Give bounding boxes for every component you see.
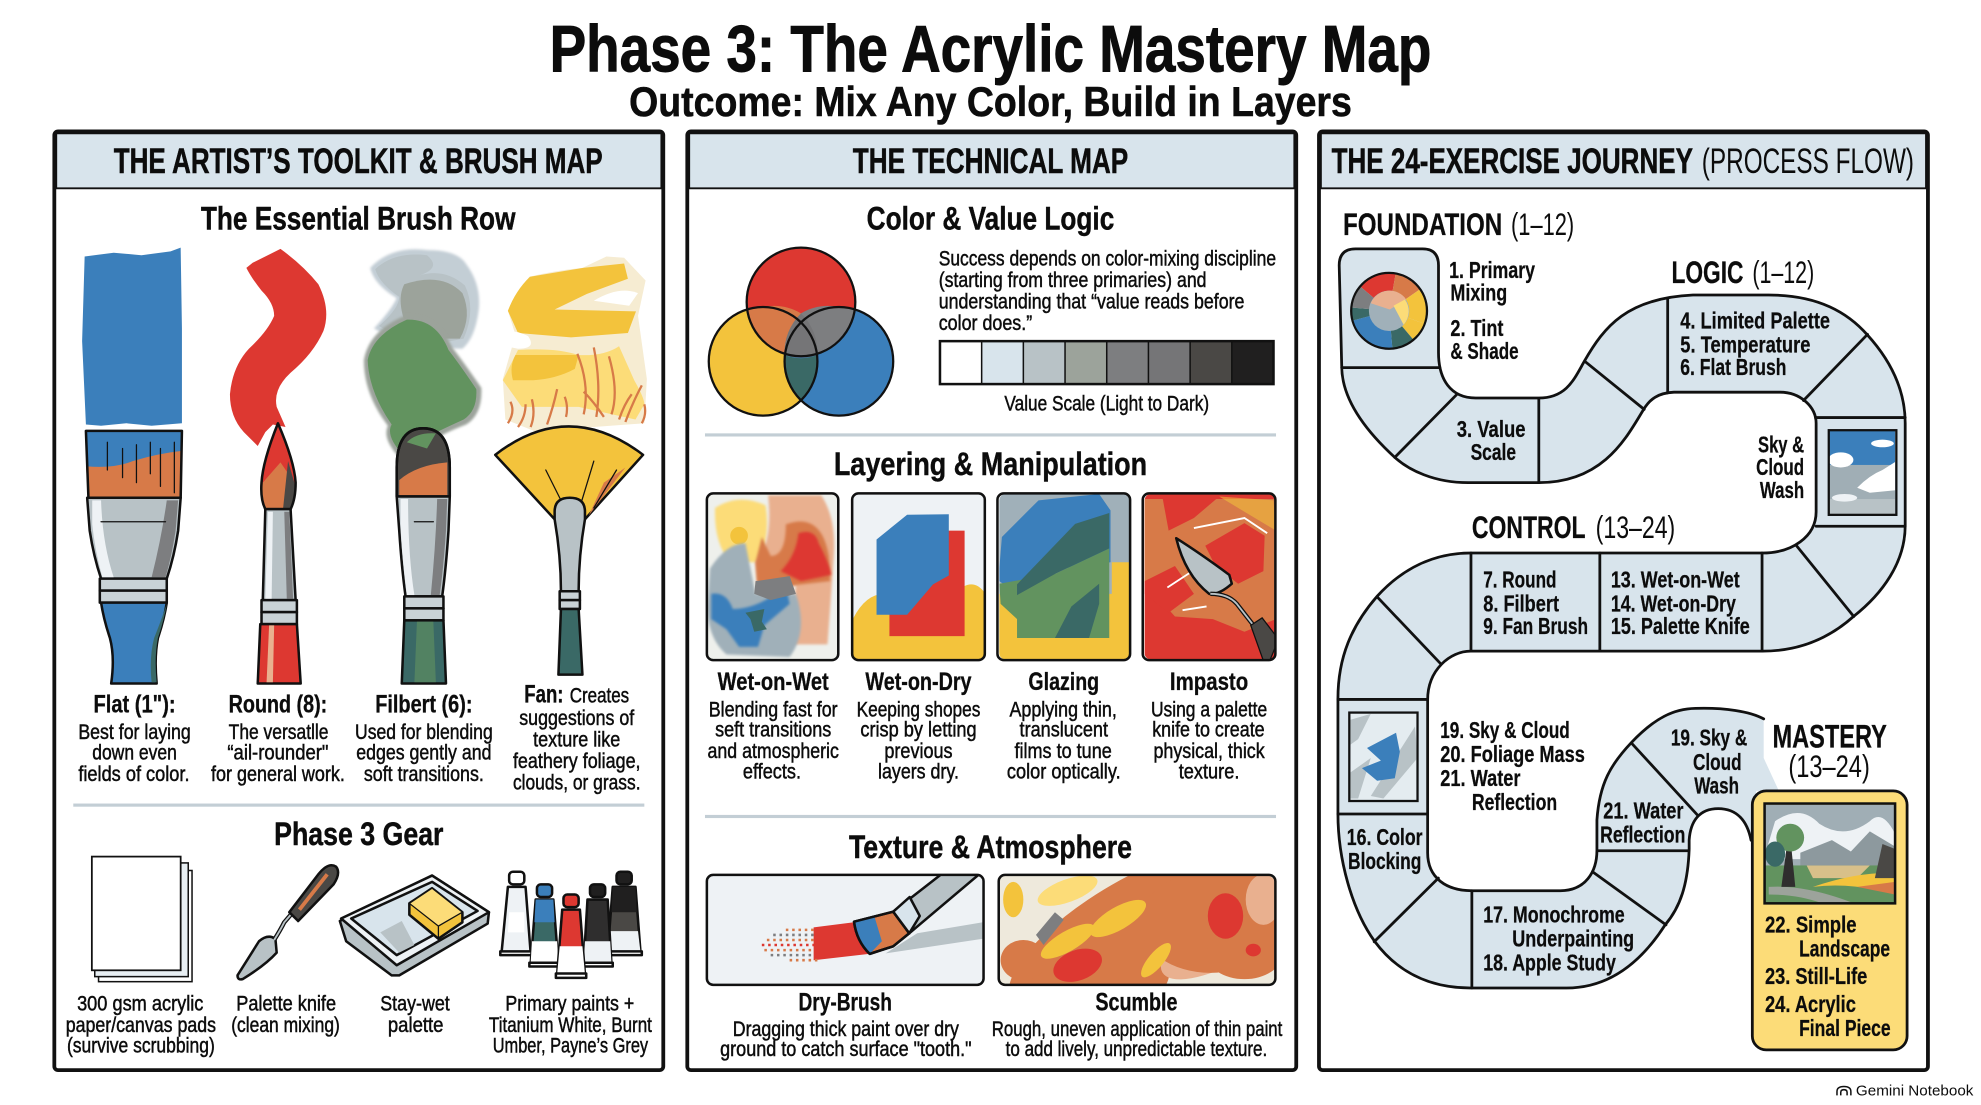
illustration: wet-on-wet card: [706, 493, 839, 661]
technique captions: Wet-on-Wet: [718, 668, 829, 696]
technique captions: color optically.: [1007, 759, 1121, 783]
sub-heading: texture and atmosphere: Texture & Atmosphere: [849, 828, 1132, 865]
technique captions: seft transitions: [715, 718, 831, 742]
panel frame: [1319, 131, 1928, 1070]
steps 19 to 21 list: 19. Sky & Cloud: [1440, 717, 1570, 743]
brush captions: down even: [92, 740, 177, 764]
process flow track: [1338, 249, 1905, 988]
panel: technical map: [687, 131, 1308, 1070]
step 16: Blocking: [1348, 848, 1421, 874]
brush captions: Round (8):: [229, 691, 327, 719]
technique captions: effects.: [743, 759, 801, 783]
technique captions: layers dry.: [878, 759, 959, 783]
step 19 on track: 19. Sky &: [1671, 724, 1747, 750]
step 3: [1457, 416, 1526, 465]
gear captions: Titanium White, Burnt: [489, 1013, 652, 1037]
technique captions: Using a palette: [1151, 697, 1267, 721]
technique captions: and atmospheric: [708, 739, 839, 763]
texture captions: Scumble: [1095, 989, 1177, 1017]
illustration: dry-brush card: [706, 874, 984, 985]
steps 22 to 24: 23. Still-Life: [1765, 963, 1867, 989]
technique captions: Keeping shopes: [857, 697, 980, 721]
technique captions: Wet-on-Dry: [865, 668, 972, 696]
steps 4 to 6: [1680, 308, 1830, 380]
value scale caption: Value Scale (Light to Dark): [1004, 392, 1209, 416]
steps 19 to 21 list: [1440, 717, 1585, 815]
sub-heading: layering and manipulation: Layering & Manipulation: [834, 445, 1147, 482]
brush captions: fields of color.: [78, 762, 190, 786]
steps 17 and 18: Underpainting: [1512, 925, 1634, 951]
brush captions: Filbert (6):: [375, 691, 473, 719]
icon: paint tubes: [500, 872, 642, 978]
heading: foundation: FOUNDATION: [1343, 206, 1502, 242]
sky and cloud wash label: Cloud: [1756, 454, 1804, 480]
steps 22 to 24: 22. Simple: [1765, 911, 1857, 937]
title: Phase 3: The Acrylic Mastery Map: [550, 12, 1431, 85]
technique captions: Applying thin,: [1009, 697, 1117, 721]
steps 17 and 18: 17. Monochrome: [1483, 901, 1625, 927]
panel heading: THE ARTIST’S TOOLKIT & BRUSH MAP: [114, 142, 603, 181]
sky and cloud wash label: [1756, 431, 1804, 503]
heading: mastery: (13–24): [1788, 748, 1870, 784]
steps 17 and 18: [1483, 901, 1634, 975]
steps 13 to 15: 13. Wet-on-Wet: [1611, 566, 1740, 592]
steps 4 to 6: 4. Limited Palette: [1680, 308, 1830, 334]
technique captions: Glazing: [1028, 668, 1099, 696]
icon: fan brush with yellow stroke: [495, 256, 647, 675]
heading: logic: (1–12): [1752, 254, 1814, 290]
icon: stay-wet palette: [340, 876, 489, 975]
gear captions: palette: [388, 1013, 443, 1037]
step 19 on track: [1671, 724, 1747, 798]
brush captions: Fan:: [524, 680, 563, 708]
brush captions: Creates: [570, 683, 629, 707]
steps 4 to 6: 5. Temperature: [1680, 332, 1810, 358]
panel heading: THE TECHNICAL MAP: [853, 142, 1128, 181]
text block: color logic: Success depends on color-mixing discipline: [939, 246, 1276, 270]
text block: color logic: color does.”: [939, 311, 1032, 335]
panel: artist's toolkit and brush map: [54, 131, 663, 1070]
steps 1 and 2: [1449, 257, 1535, 364]
brush captions: for general work.: [211, 762, 345, 786]
chart: value scale: [940, 341, 1274, 416]
heading: mastery: MASTERY: [1773, 717, 1887, 754]
steps 13 to 15: 15. Palette Knife: [1611, 613, 1750, 639]
icon: color blocking painting: [1349, 713, 1418, 801]
gear captions: Palette knife: [236, 992, 336, 1016]
track ribbon: [1338, 249, 1905, 988]
steps 19 to 21 list: 21. Water: [1440, 765, 1521, 791]
panel heading: THE 24-EXERCISE JOURNEY: [1332, 142, 1693, 181]
steps 17 and 18: 18. Apple Study: [1483, 949, 1616, 975]
panel header band: [1321, 133, 1926, 188]
steps 7 to 9: [1483, 566, 1588, 639]
brush captions: soft transitions.: [364, 762, 484, 786]
gear captions: [66, 992, 652, 1057]
brush captions: texture like: [533, 728, 620, 752]
brush captions: clouds, or grass.: [513, 771, 641, 795]
panel frame: [687, 131, 1296, 1070]
technique captions: Blending fast for: [709, 697, 838, 721]
steps 1 and 2: 2. Tint: [1450, 315, 1504, 341]
technique captions: [708, 668, 1267, 783]
steps 1 and 2: Mixing: [1450, 280, 1507, 306]
gear captions: paper/canvas pads: [66, 1013, 216, 1037]
icon: sky painting: [1828, 430, 1896, 515]
illustration: wet-on-dry card: [852, 493, 985, 661]
steps 19 to 21 list: 20. Foliage Mass: [1440, 741, 1585, 767]
texture captions: Dragging thick paint over dry: [733, 1017, 959, 1041]
illustration: glazing card: [997, 493, 1132, 661]
mastery card: [1752, 791, 1907, 1050]
heading: control: CONTROL: [1472, 509, 1586, 545]
illustration: scumble card: [997, 874, 1277, 986]
icon: round brush with red stroke: [230, 249, 326, 684]
technique captions: physical, thick: [1153, 739, 1265, 763]
step 19 on track: Cloud: [1693, 749, 1742, 775]
text block: color logic: understanding that “value reads before: [939, 289, 1244, 313]
chart: three-color venn diagram: [709, 248, 893, 416]
steps 1 and 2: 1. Primary: [1449, 257, 1535, 283]
technique captions: previous: [884, 739, 953, 763]
brush captions: edges gently and: [356, 740, 491, 764]
gear captions: Umber, Payne’s Grey: [493, 1033, 648, 1057]
technique captions: translucent: [1020, 718, 1108, 742]
step 3: 3. Value: [1457, 416, 1526, 442]
gear captions: 300 gsm acrylic: [77, 992, 204, 1016]
icon: palette knife: [238, 865, 338, 979]
panel frame: [54, 131, 663, 1070]
text block: color logic: (starting from three primaries) and: [939, 268, 1207, 292]
technique captions: texture.: [1179, 759, 1239, 783]
heading: foundation: (1–12): [1511, 206, 1574, 242]
brush captions: suggestions of: [519, 706, 634, 730]
step 19 on track: Wash: [1694, 772, 1739, 798]
steps 22 to 24: 24. Acrylic: [1765, 991, 1856, 1017]
track extension beneath mastery heading: [1743, 721, 1779, 839]
brush captions: Flat (1"):: [93, 691, 176, 719]
texture captions: to add lively, unpredictable texture.: [1006, 1037, 1267, 1061]
steps 4 to 6: 6. Flat Brush: [1680, 354, 1786, 380]
gear captions: Stay-wet: [380, 992, 450, 1016]
technique captions: films to tune: [1015, 739, 1112, 763]
step 21 on track: [1600, 798, 1685, 848]
icon: paper pads: [92, 857, 192, 982]
step 21 on track: Reflection: [1600, 822, 1685, 848]
brush captions: feathery foliage,: [513, 749, 641, 773]
steps 1 and 2: & Shade: [1450, 338, 1519, 364]
steps 7 to 9: 9. Fan Brush: [1483, 613, 1588, 639]
steps 13 to 15: [1611, 566, 1750, 639]
brush captions: The versatlle: [229, 720, 328, 744]
texture captions: [720, 989, 1282, 1061]
texture captions: Dry-Brush: [798, 989, 892, 1017]
sub-heading: brush row: The Essential Brush Row: [201, 199, 516, 236]
steps 19 to 21 list: Reflection: [1472, 789, 1557, 815]
technique captions: knife to create: [1152, 718, 1265, 742]
sub-heading: color and value logic: Color & Value Logic: [867, 199, 1114, 236]
sky and cloud wash label: Sky &: [1758, 431, 1804, 457]
panel header band: [689, 133, 1294, 188]
sub-heading: phase 3 gear: Phase 3 Gear: [274, 815, 444, 852]
sky and cloud wash label: Wash: [1760, 477, 1804, 503]
panel: 24-exercise journey: [1319, 131, 1928, 1070]
texture captions: ground to catch surface "tooth.": [720, 1037, 972, 1061]
heading: mastery: [1773, 717, 1887, 784]
steps 22 to 24: [1765, 911, 1891, 1041]
technique captions: crisp by letting: [860, 718, 977, 742]
steps 7 to 9: 7. Round: [1483, 566, 1556, 592]
icon: color wheel: [1351, 273, 1427, 349]
steps 7 to 9: 8. Filbert: [1483, 591, 1559, 617]
gear captions: (clean mixing): [231, 1013, 340, 1037]
steps 22 to 24: Landscape: [1799, 935, 1890, 961]
icon: landscape painting: [1764, 804, 1896, 905]
step 16: 16. Color: [1347, 824, 1423, 850]
steps 13 to 15: 14. Wet-on-Dry: [1611, 591, 1736, 617]
heading: control: (13–24): [1596, 509, 1675, 545]
brush captions: [78, 680, 641, 795]
icon: flat brush with blue stroke: [82, 248, 182, 684]
panel header band: [56, 133, 661, 188]
step 3: Scale: [1471, 439, 1516, 465]
brush captions: “ail-rounder": [227, 740, 328, 764]
gear captions: (survive scrubbing): [67, 1033, 215, 1057]
texture captions: Rough, uneven application of thin paint: [992, 1017, 1282, 1041]
heading: logic: LOGIC: [1671, 254, 1743, 290]
steps 22 to 24: Final Piece: [1799, 1015, 1891, 1041]
icon: filbert brush with grey-green stroke: [364, 249, 481, 684]
gear captions: Primary paints +: [505, 992, 634, 1016]
step 21 on track: 21. Water: [1603, 798, 1684, 824]
brush captions: Best for laying: [78, 720, 191, 744]
step 16: [1347, 824, 1423, 874]
brush captions: Used for blending: [355, 720, 493, 744]
illustration: impasto card: [1143, 493, 1279, 661]
subtitle: Outcome: Mix Any Color, Build in Layers: [629, 78, 1352, 125]
watermark: Gemini Notebook: [1856, 1082, 1974, 1099]
text block: color logic: [939, 246, 1276, 335]
technique captions: Impasto: [1170, 668, 1248, 696]
